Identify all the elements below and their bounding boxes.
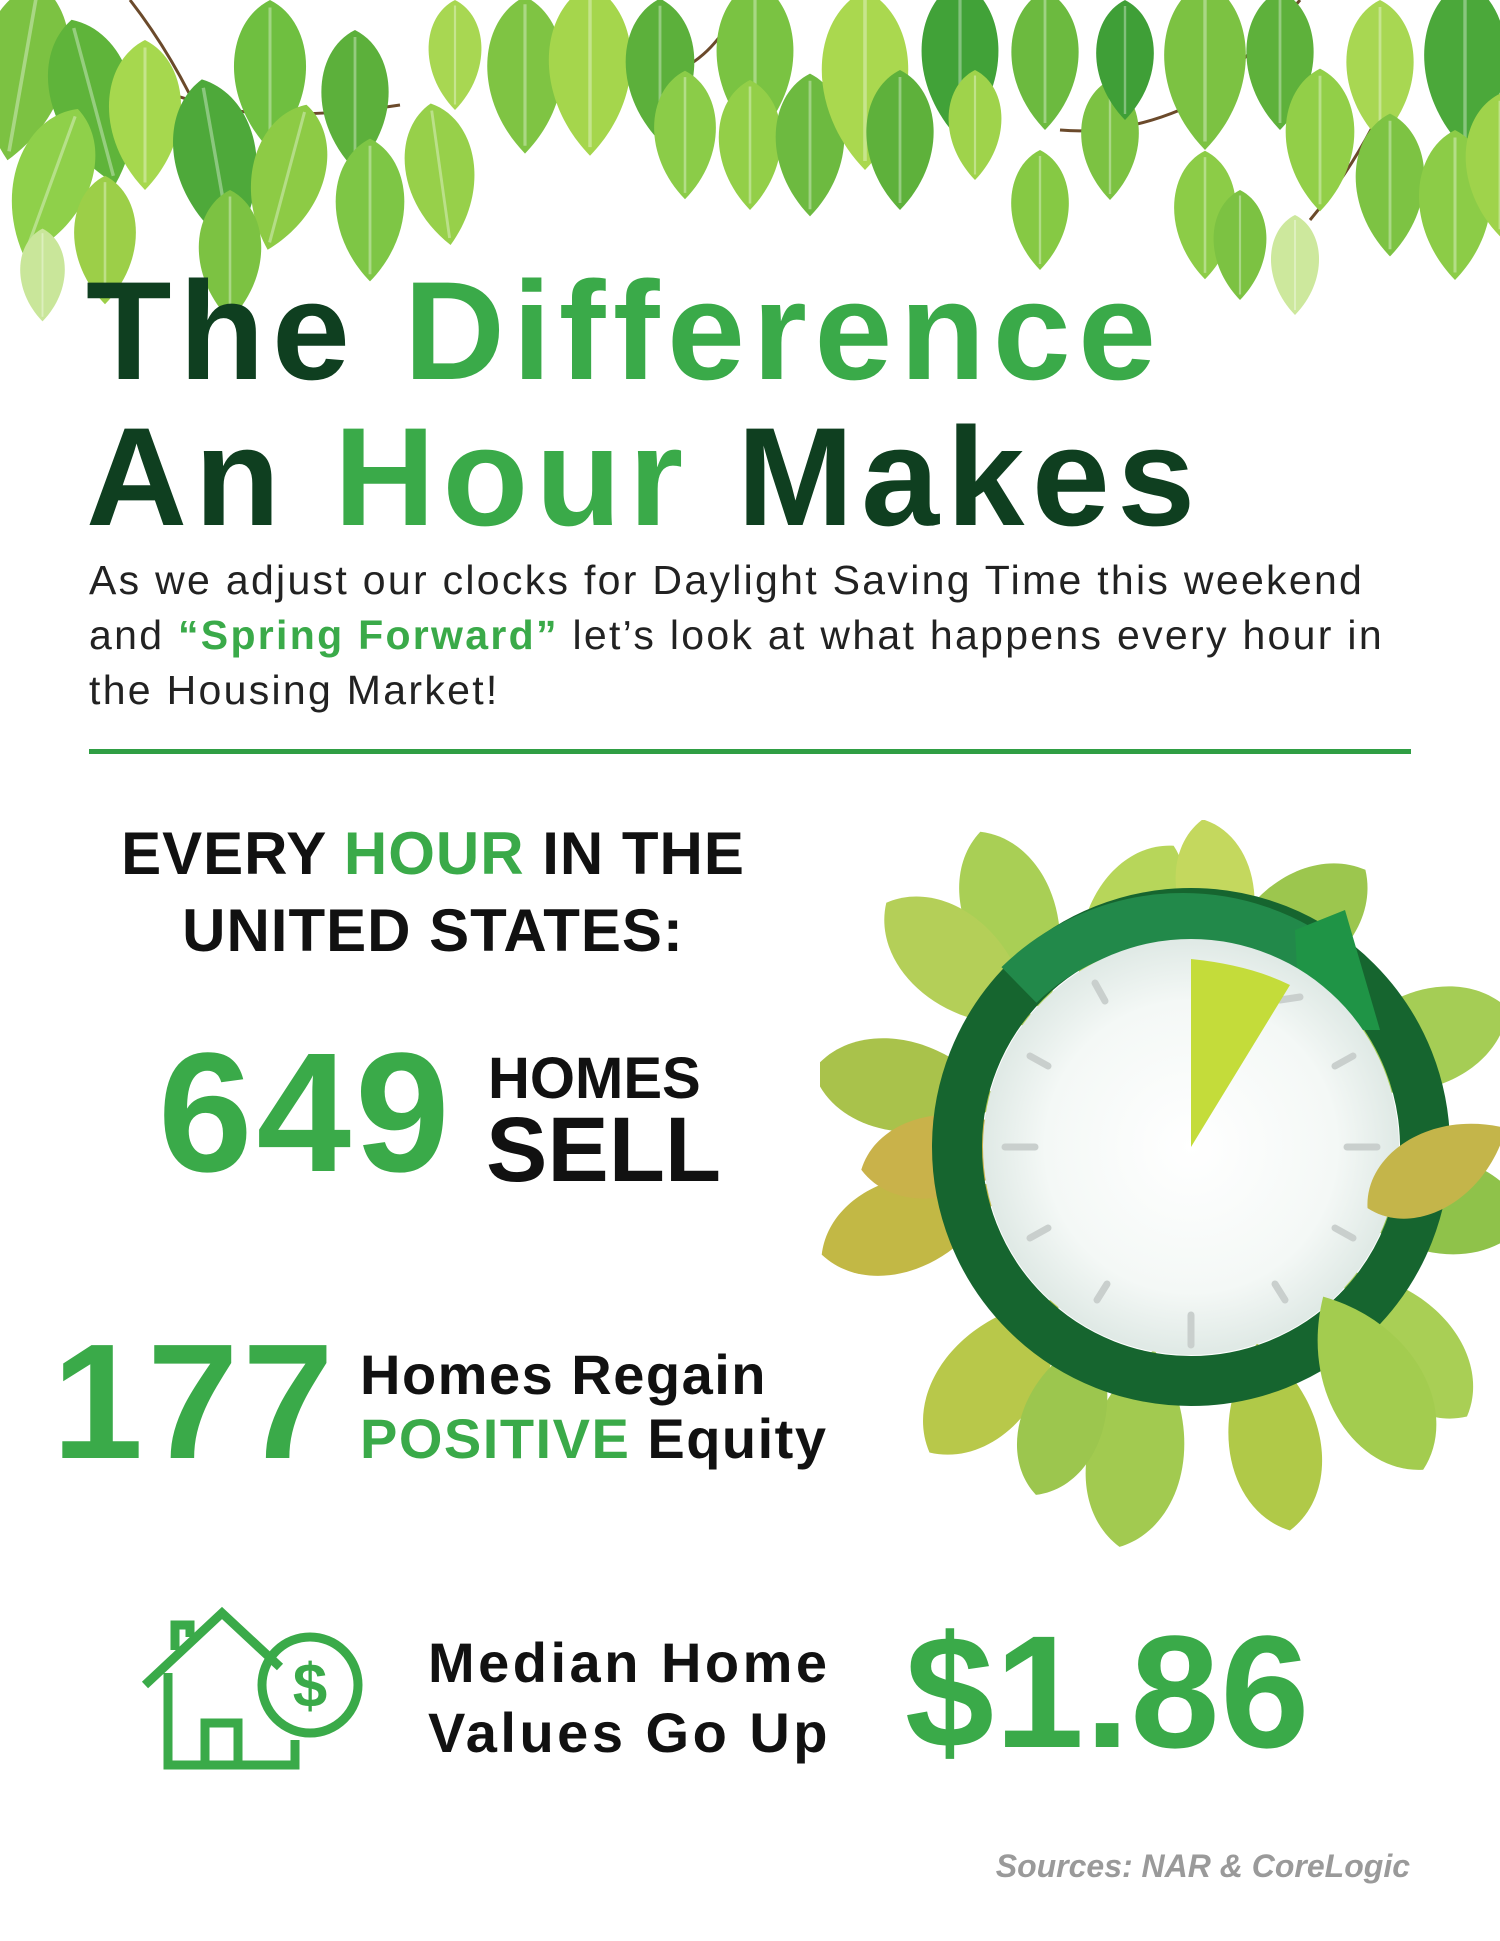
median home values text (428, 1631, 831, 1764)
median home values text: Values Go Up (428, 1701, 831, 1764)
stat: 649 homes sell: HOMES (488, 1046, 701, 1111)
subtitle: and “Spring Forward” let’s look at what happens every hour in (89, 612, 1384, 658)
heading: every hour (121, 820, 745, 964)
title: An Hour Makes (86, 398, 1203, 555)
stat: 177 positive equity (52, 1310, 827, 1493)
title (86, 252, 1203, 555)
stat: 177 positive equity: POSITIVE Equity (360, 1407, 827, 1470)
stat: 177 positive equity: Homes Regain (360, 1343, 767, 1406)
surrounding leaves (805, 813, 1500, 1555)
clock illustration (820, 820, 1500, 1547)
ring (957, 913, 1425, 1381)
clock face (983, 939, 1399, 1355)
stat: 649 homes sell (158, 1018, 721, 1208)
heading: every hour: UNITED STATES: (182, 897, 684, 964)
stat: 649 homes sell: SELL (486, 1099, 721, 1201)
sources: Sources: NAR & CoreLogic (996, 1848, 1410, 1884)
subtitle: As we adjust our clocks for Daylight Saving Time this weekend (89, 557, 1364, 603)
icon: house with dollar: $ (293, 1652, 327, 1721)
title: The Difference (86, 252, 1164, 409)
hour wedge (1191, 959, 1290, 1147)
icon: house with dollar (142, 1607, 362, 1770)
stat: 649 homes sell: 649 (158, 1018, 454, 1208)
stat: $1.86: $1.86 (905, 1602, 1310, 1781)
subtitle: the Housing Market! (89, 667, 500, 713)
decorative leaves top (0, 0, 1500, 322)
subtitle (89, 557, 1384, 713)
stat: 177 positive equity: 177 (52, 1310, 338, 1493)
median home values text: Median Home (428, 1631, 831, 1694)
heading: every hour: EVERY HOUR IN THE (121, 820, 745, 887)
